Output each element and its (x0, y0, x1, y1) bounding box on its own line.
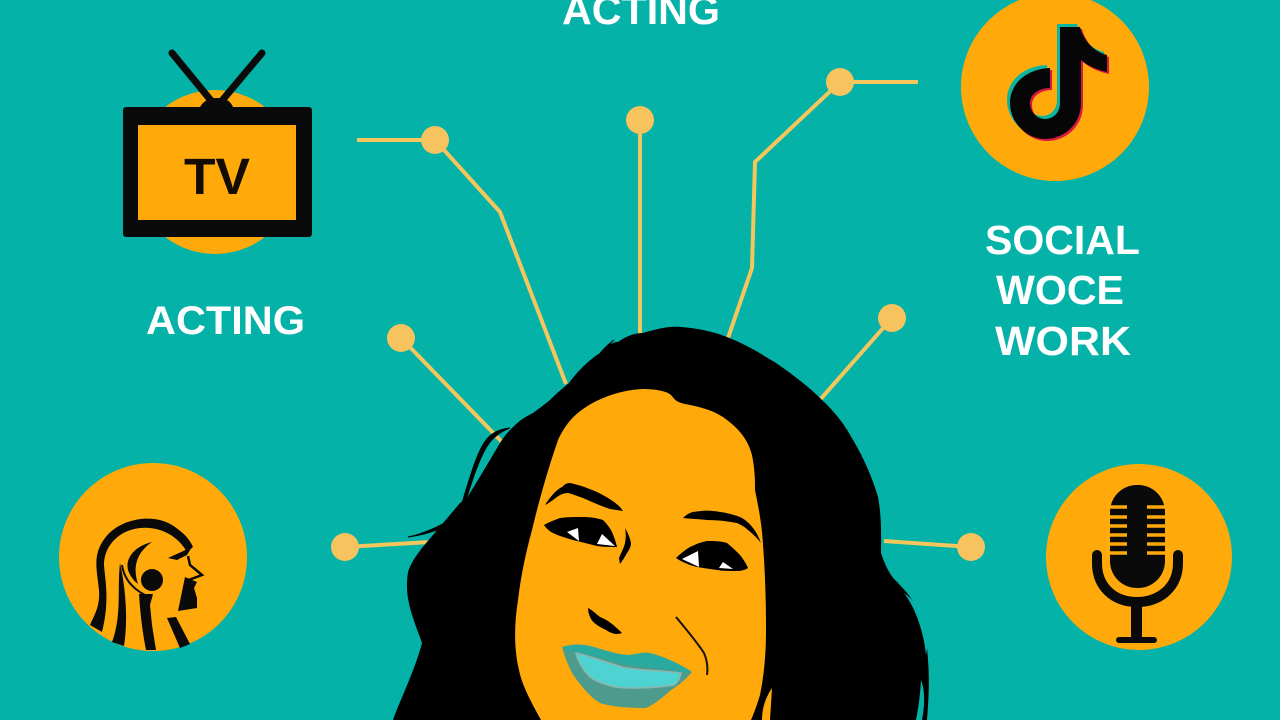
icon: television (123, 53, 312, 254)
icon: television: TV (184, 148, 250, 205)
connector: upper right (818, 304, 906, 402)
icon: microphone (1046, 464, 1232, 650)
face (515, 389, 766, 720)
connector: lower right (884, 533, 985, 561)
right eye (676, 541, 748, 571)
hair (393, 327, 929, 720)
teal gaps in hair (904, 593, 927, 720)
connector: to TV (357, 126, 566, 384)
label: social voice work: WORK (995, 318, 1131, 364)
connector lines and nodes (331, 68, 985, 561)
illustration: woman portrait (393, 327, 929, 720)
nose bridge (619, 528, 631, 564)
connector: top centre (626, 106, 654, 337)
icon: social music note (961, 0, 1149, 181)
hair wisps (408, 340, 614, 537)
label: acting: ACTING (146, 299, 305, 343)
label: social voice work: SOCIAL (985, 217, 1140, 263)
label: social voice work: WOCE (996, 267, 1124, 313)
right eyebrow (683, 511, 761, 543)
left eye (544, 517, 617, 547)
connector: to social icon (728, 68, 918, 338)
left eyebrow (545, 483, 623, 511)
label: social voice work (985, 217, 1140, 364)
connector: upper left (387, 324, 503, 443)
lips (562, 645, 692, 708)
nostril (588, 608, 622, 634)
icon: person with headset (59, 463, 247, 651)
connector: lower left (331, 533, 430, 561)
smile line (676, 617, 707, 675)
neck sliver (762, 688, 772, 720)
